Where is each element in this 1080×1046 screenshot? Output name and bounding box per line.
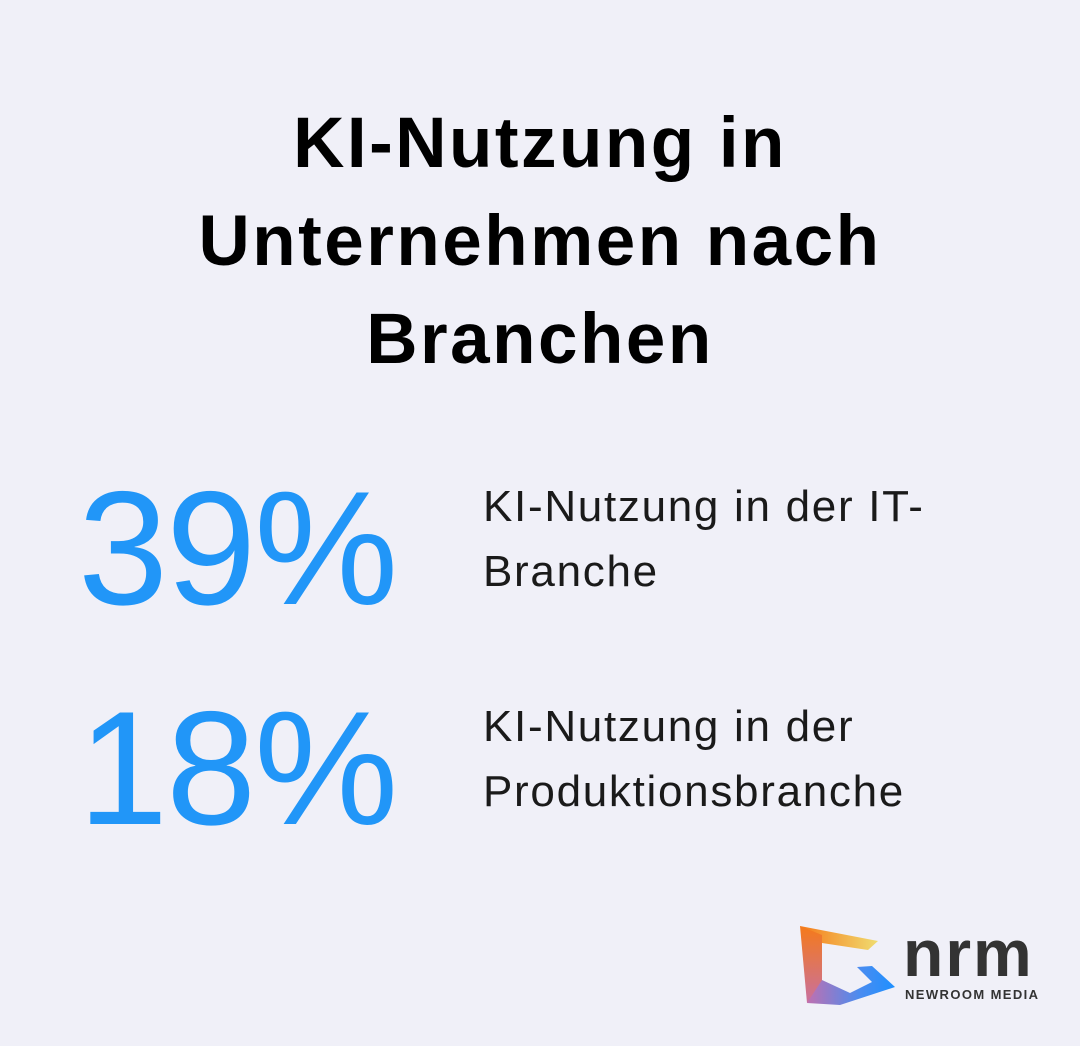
text: Produktionsbranche: KI-Nutzung in der xyxy=(483,702,854,751)
text: IT-Branche: KI-Nutzung in der IT- xyxy=(483,482,925,531)
text: Produktionsbranche xyxy=(483,702,905,816)
title: Branchen xyxy=(366,300,714,379)
text: IT-Branche xyxy=(483,482,925,596)
title: Unternehmen nach xyxy=(198,202,882,281)
title xyxy=(198,104,882,379)
text: Produktionsbranche: Produktionsbranche xyxy=(483,767,905,816)
logo xyxy=(800,916,1039,1005)
stat: 39%: 39% xyxy=(78,458,396,639)
logo text: nrm xyxy=(903,916,1034,990)
title: KI-Nutzung in xyxy=(293,104,787,183)
stat: 18%: 18% xyxy=(78,678,396,859)
text: IT-Branche: Branche xyxy=(483,547,659,596)
icon: logo mark xyxy=(800,926,895,1005)
logo: NEWROOM MEDIA xyxy=(905,987,1039,1002)
